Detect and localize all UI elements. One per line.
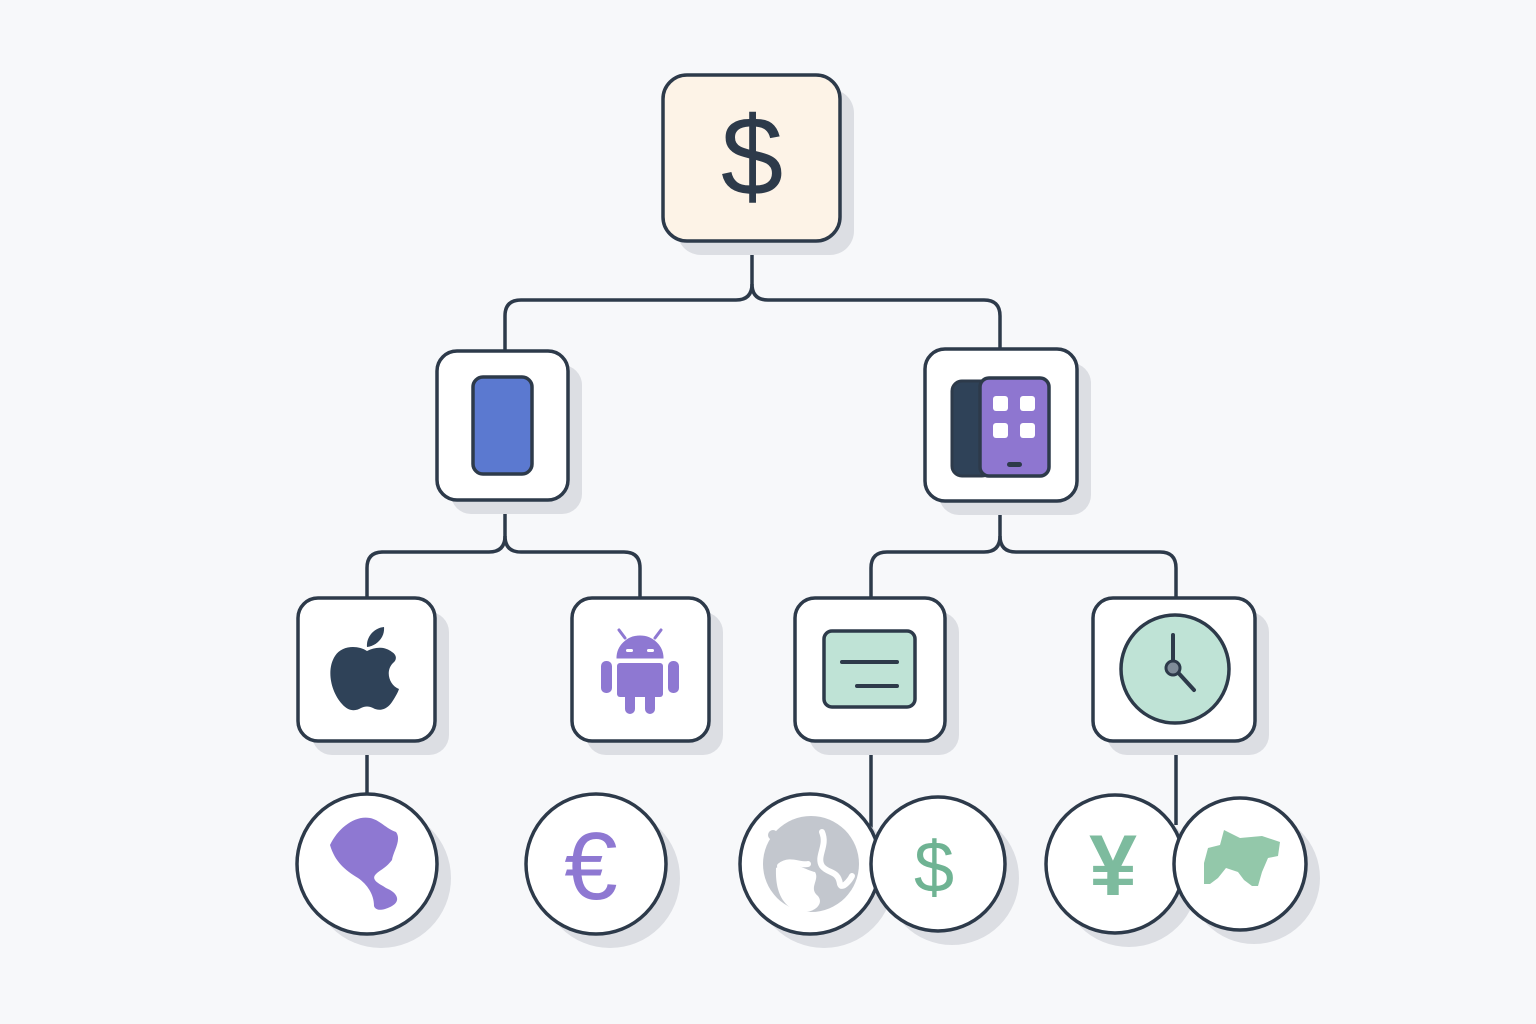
root node: dollar: $ [721,94,783,219]
node: android [572,598,723,755]
circle: green dollar: $ [914,828,954,908]
circle: euro: € [564,813,618,920]
node: clock [1093,598,1269,755]
node: card [795,598,959,755]
node: apple [298,598,449,755]
circle: yen: ¥ [1089,818,1137,914]
circle: green dollar [871,797,1019,945]
circle: purple globe [297,794,451,948]
root node: dollar [663,75,854,255]
circle: yen [1046,795,1198,947]
circle: green map [1174,798,1320,944]
circle: euro [526,794,680,948]
node: tablet apps [925,349,1091,515]
connectors [367,241,1176,830]
node: smartphone [437,351,582,514]
circle: gray globe [740,794,894,948]
